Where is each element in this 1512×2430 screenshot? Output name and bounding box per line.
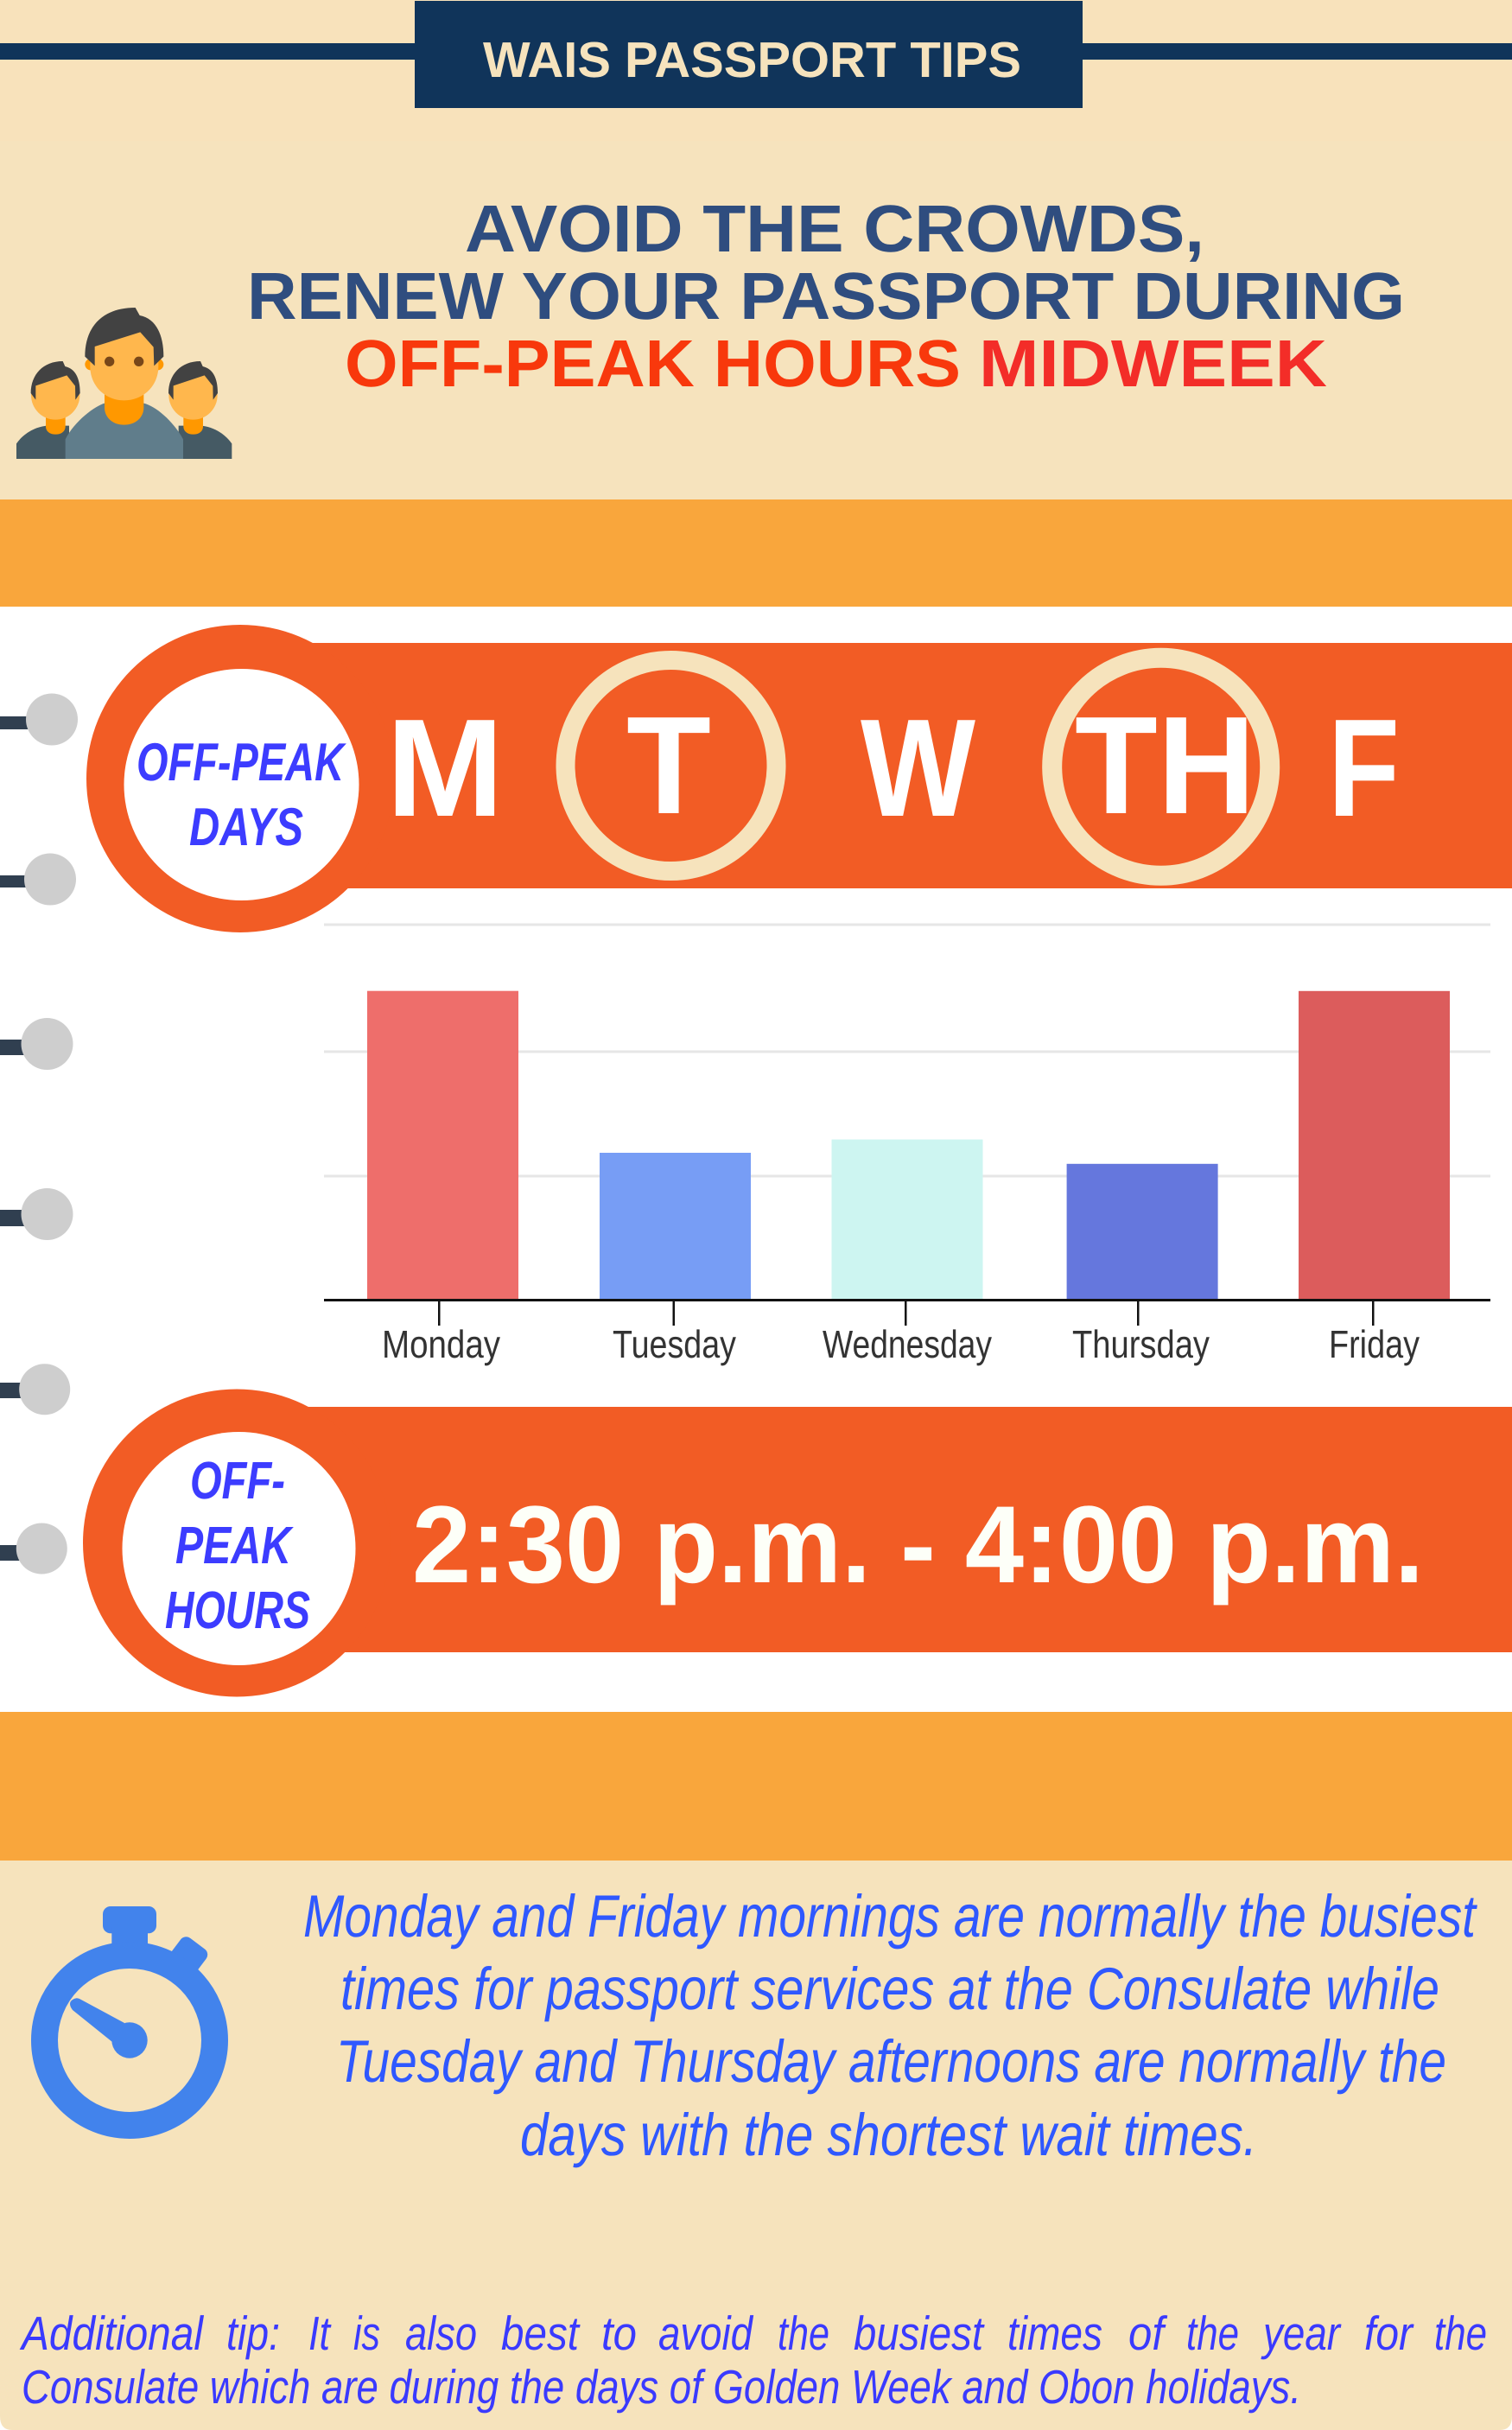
- title: RENEW YOUR PASSPORT DURING: [247, 259, 1405, 334]
- off-peak hours label: [165, 1451, 310, 1639]
- text block: additional tip: the: [1434, 2306, 1487, 2360]
- bar: wednesday: [831, 1140, 983, 1300]
- icon: crowd of people: [16, 308, 232, 459]
- thursday highlight ring: [1052, 658, 1270, 875]
- text block: additional tip: is: [353, 2306, 380, 2360]
- off-peak hours label: OFF-: [190, 1451, 285, 1510]
- text block: main tip: [303, 1883, 1477, 2168]
- text block: additional tip: the: [1186, 2306, 1239, 2360]
- text block: additional tip: tip:: [226, 2306, 280, 2360]
- axis labels: Wednesday: [823, 1322, 992, 1366]
- axis labels: Tuesday: [613, 1322, 736, 1366]
- weekday letters: W: [861, 690, 975, 846]
- panel: off-peak hours: [83, 1390, 1512, 1697]
- time range: 2:30 p.m. - 4:00 p.m.: [412, 1483, 1424, 1606]
- weekday letters: M: [386, 690, 504, 846]
- off-peak days label: DAYS: [189, 798, 303, 857]
- axis labels: Monday: [382, 1322, 500, 1366]
- orange band top: [0, 499, 1512, 607]
- axis labels: Friday: [1329, 1322, 1420, 1366]
- bar: thursday: [1067, 1164, 1218, 1300]
- text block: additional tip: avoid: [658, 2306, 754, 2360]
- title: [247, 192, 1405, 401]
- weekday letters: T: [626, 688, 711, 843]
- binder holes: [0, 693, 78, 1574]
- title: AVOID THE CROWDS,: [465, 192, 1204, 266]
- text block: main tip: days with the shortest wait times.: [520, 2102, 1257, 2168]
- weekday letters: F: [1328, 690, 1400, 846]
- weekday letters: [386, 688, 1400, 846]
- title: OFF-PEAK HOURS: [345, 327, 961, 401]
- axis labels: Thursday: [1072, 1322, 1210, 1366]
- bar: tuesday: [600, 1153, 751, 1300]
- text block: additional tip: It: [308, 2306, 332, 2360]
- panel: header background: [0, 0, 1512, 499]
- text block: additional tip: to: [601, 2306, 637, 2360]
- text block: additional tip: busiest: [854, 2306, 985, 2360]
- text block: additional tip: year: [1261, 2306, 1342, 2360]
- bar chart: [324, 923, 1490, 1366]
- title: MIDWEEK: [979, 327, 1327, 401]
- off-peak hours label: PEAK: [175, 1516, 294, 1574]
- panel: off-peak days: [86, 625, 1512, 932]
- weekday letters: TH: [1075, 688, 1255, 843]
- text block: additional tip: best: [501, 2306, 581, 2360]
- bar: friday: [1299, 991, 1450, 1300]
- icon: stopwatch: [45, 1906, 214, 2126]
- header banner: [0, 1, 1512, 108]
- text block: additional tip: for: [1364, 2306, 1414, 2360]
- text block: additional tip: [19, 2306, 1487, 2414]
- axis labels: [382, 1322, 1420, 1366]
- off-peak days label: [137, 733, 346, 857]
- axis and ticks: [324, 1299, 1490, 1326]
- text block: additional tip: Additional: [19, 2306, 205, 2360]
- tuesday highlight ring: [565, 660, 776, 871]
- text block: additional tip: also: [405, 2306, 477, 2360]
- text block: additional tip: times: [1007, 2306, 1102, 2360]
- text block: additional tip: of: [1128, 2306, 1168, 2360]
- orange band bottom: [0, 1712, 1512, 1861]
- off-peak hours label: HOURS: [165, 1581, 310, 1639]
- off-peak days label: OFF-PEAK: [137, 733, 346, 792]
- header banner: WAIS PASSPORT TIPS: [483, 32, 1021, 88]
- text block: additional tip: the: [778, 2306, 829, 2360]
- bar: monday: [367, 991, 518, 1300]
- panel: bottom background: [0, 1861, 1512, 2430]
